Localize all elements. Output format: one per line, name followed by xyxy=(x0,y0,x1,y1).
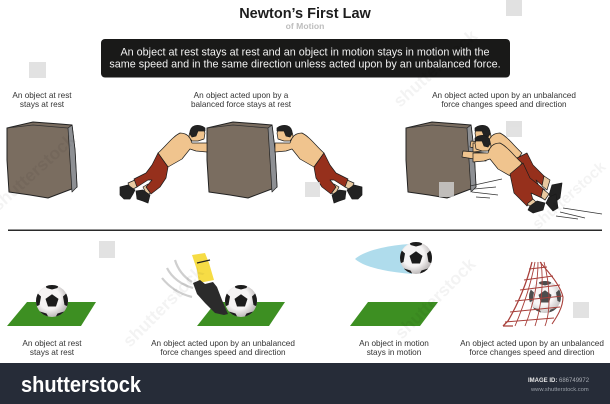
caption: balanced force: An object acted upon by a xyxy=(194,91,289,100)
caption: unbalanced force: An object acted upon by an unbalanced xyxy=(432,91,576,100)
icon: football xyxy=(399,240,433,275)
caption: ball in net xyxy=(460,339,604,357)
icon: grass field xyxy=(350,302,438,326)
footer logo: shutterstock xyxy=(21,372,142,397)
definition banner: An object at rest stays at rest and an object in motion stays in motion with the xyxy=(120,46,490,58)
caption: ball kicked: An object acted upon by an unbalanced xyxy=(151,339,295,348)
panel: ball in net xyxy=(460,262,604,357)
caption: ball at rest: An object at rest xyxy=(22,339,82,348)
caption: ball at rest xyxy=(22,339,82,357)
caption: balanced force xyxy=(191,91,292,109)
title: Newton’s First Law xyxy=(239,6,372,22)
watermark squares xyxy=(29,0,589,318)
icon: football xyxy=(224,283,258,318)
caption: ball in motion: stays in motion xyxy=(367,348,422,357)
caption: ball kicked: force changes speed and direction xyxy=(160,348,286,357)
icon: grass field xyxy=(197,302,285,326)
divider xyxy=(8,230,602,231)
caption: ball kicked xyxy=(151,339,295,357)
caption: ball in net: force changes speed and direction xyxy=(469,348,595,357)
caption: An object at rest xyxy=(12,91,72,100)
caption: unbalanced force: force changes speed and direction xyxy=(441,100,567,109)
panel: rock balanced forces xyxy=(120,91,362,203)
panel: rock unbalanced force xyxy=(406,91,602,219)
footer bar xyxy=(0,363,610,404)
icon: football xyxy=(528,279,562,314)
caption: ball in motion: An object in motion xyxy=(359,339,429,348)
icon: rock xyxy=(7,122,77,198)
website: www.shutterstock.com xyxy=(530,387,589,393)
icon: goal net xyxy=(503,262,563,326)
icon: motion trail xyxy=(355,244,412,274)
subtitle: of Motion xyxy=(286,21,324,31)
caption: ball in net: An object acted upon by an unbalanced xyxy=(460,339,604,348)
caption: stays at rest xyxy=(20,100,65,109)
panel: ball in motion xyxy=(350,240,438,357)
caption: unbalanced force xyxy=(432,91,576,109)
caption: ball at rest: stays at rest xyxy=(30,348,75,357)
icon: rock between two men xyxy=(120,122,362,203)
icon: kicking leg xyxy=(162,253,228,315)
icon: rock pushed by two men xyxy=(406,122,602,219)
definition banner xyxy=(101,39,510,78)
panel: ball kicked xyxy=(151,253,295,357)
caption xyxy=(12,91,72,109)
panel: ball at rest xyxy=(7,283,96,357)
caption: balanced force: balanced force stays at rest xyxy=(191,100,292,109)
caption: ball in motion xyxy=(359,339,429,357)
icon: grass field xyxy=(7,302,96,326)
panel: rock at rest xyxy=(7,91,77,198)
icon: football xyxy=(35,283,69,318)
image id: IMAGE ID: 686749972 xyxy=(528,378,590,384)
definition banner: same speed and in the same direction unless acted upon by an unbalanced force. xyxy=(109,58,501,70)
